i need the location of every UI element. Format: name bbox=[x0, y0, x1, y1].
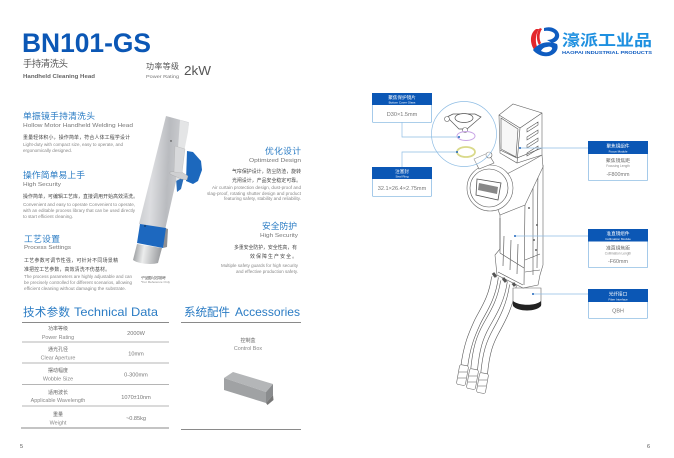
text block: high security: and effective production safety. bbox=[236, 269, 298, 274]
callout: fiber interface: QBH bbox=[612, 308, 624, 314]
row: power rating bbox=[42, 325, 146, 341]
row: wobble size: 摆动幅度 bbox=[48, 367, 68, 374]
row: wobble size: Wobble Size bbox=[43, 376, 73, 382]
text block: optimized design: 气帘保护设计，防尘防渣，旋转 bbox=[232, 168, 301, 175]
row: weight: 重量 bbox=[53, 411, 63, 418]
callout: seal ring: 32.1×26.4×2.75mm bbox=[378, 186, 427, 192]
logo: 濠派工业品 bbox=[562, 30, 652, 50]
callout: collimation module: Collimation Module bbox=[605, 237, 631, 241]
callout: focus module: -F800mm bbox=[606, 172, 630, 178]
row: power rating: 2000W bbox=[127, 331, 146, 337]
row: clear aperture: Clear Aperture bbox=[41, 356, 75, 362]
logo bbox=[531, 27, 653, 56]
callout: collimation module: 准直镜焦距 bbox=[606, 244, 630, 252]
text block: process settings: 准把控工艺参数，高效清洗不伤基材。 bbox=[24, 266, 110, 273]
callout: seal ring: 注塞封 bbox=[395, 168, 409, 175]
reference only note bbox=[141, 275, 171, 284]
reference only note: *产品图片仅供参考 bbox=[141, 275, 166, 280]
row: wobble size: 0-300mm bbox=[124, 372, 148, 378]
callout: fiber interface: Fiber Interface bbox=[608, 298, 628, 302]
text block: high security: 多重安全防护，安全性高，有 bbox=[234, 244, 297, 251]
callout: collimation module: 准直镜组件 bbox=[607, 230, 630, 237]
row: power rating: Power Rating bbox=[42, 335, 74, 341]
text block: high security: 安全防护 bbox=[262, 220, 297, 231]
panel: accessories bbox=[181, 322, 301, 430]
text block: process settings: 工艺设置 bbox=[24, 234, 60, 244]
callout: focus module: 聚焦镜焦距 bbox=[606, 157, 630, 164]
text block: hollow motor head: Hollow Motor Handheld Welding Head bbox=[23, 123, 133, 129]
heading: technical data: 技术参数 bbox=[23, 305, 70, 319]
text block: process settings: The process parameters are highly adjustable and can bbox=[24, 274, 133, 279]
text block: optimized design: Optimized Design bbox=[249, 158, 301, 164]
text block: process settings: Process Settings bbox=[24, 245, 71, 251]
page number left: 5 bbox=[20, 444, 23, 450]
text block: optimized design: Air curtain protection design, dust-proof and bbox=[212, 185, 302, 190]
text block: high security: 效保障生产安全。 bbox=[250, 253, 297, 260]
text block: easy operation: 操作简单，可编辑工艺库，直接调用开始高效清洗。 bbox=[23, 193, 138, 200]
text block: hollow motor head: 单振镜手持清洗头 bbox=[23, 110, 95, 121]
callout: fiber interface bbox=[532, 289, 648, 318]
row: wobble size bbox=[43, 367, 148, 382]
subtitle: handheld cleaning head: 手持清洗头 bbox=[23, 58, 68, 69]
row: weight: ~0.85kg bbox=[126, 416, 146, 422]
row: wavelength: Applicable Wavelength bbox=[31, 398, 85, 404]
text block: optimized design: 优化设计 bbox=[265, 145, 301, 156]
callout: focus module: 聚焦镜组件 bbox=[607, 142, 630, 150]
power rating: 2kW bbox=[184, 63, 212, 78]
panel: accessories: 控制盒 bbox=[240, 337, 256, 344]
text block: easy operation: to start efficient cleaning. bbox=[23, 214, 73, 219]
text block: hollow motor head: 重量轻体积小，操作简单，符合人体工程学设计 bbox=[23, 134, 130, 141]
table: technical data bbox=[21, 322, 169, 428]
row: weight bbox=[50, 411, 146, 426]
reference only note: *For Reference Only bbox=[141, 280, 171, 284]
heading: technical data: Technical Data bbox=[74, 305, 158, 319]
heading: accessories: Accessories bbox=[235, 305, 300, 319]
title: BN101-GS bbox=[22, 28, 151, 58]
text block: optimized design: slag-proof, rotating shutter design and product bbox=[207, 191, 302, 196]
row: wavelength: 1070±10nm bbox=[121, 395, 151, 401]
text block: process settings: 工艺参数可调节性强，可针对不同场景精 bbox=[24, 257, 118, 264]
text block: high security: High Security bbox=[260, 233, 298, 239]
callout: seal ring: Seal Ring bbox=[395, 174, 409, 178]
text block: easy operation: 操作简单易上手 bbox=[23, 169, 85, 180]
icon: logo swirl bbox=[531, 27, 559, 56]
text block: high security: Multiple safety guards for high security bbox=[221, 263, 299, 268]
row: weight: Weight bbox=[50, 420, 67, 426]
purple ring bbox=[457, 132, 475, 140]
text block: easy operation: Convenient and easy to operate Convenient to operate, bbox=[23, 202, 135, 207]
text block: high security bbox=[221, 220, 299, 274]
callout: bottom cover glass bbox=[372, 93, 460, 138]
hoses bbox=[456, 277, 513, 394]
text block: hollow motor head: ergonomically designed. bbox=[23, 148, 72, 153]
row: clear aperture: 10mm bbox=[128, 352, 144, 358]
rotary disc bbox=[467, 152, 513, 211]
heading: accessories bbox=[184, 305, 300, 319]
subtitle: handheld cleaning head bbox=[23, 58, 95, 80]
panel: accessories: Control Box bbox=[234, 346, 262, 352]
callout: seal ring bbox=[372, 151, 458, 196]
subtitle: handheld cleaning head: Handheld Cleaning Head bbox=[23, 74, 95, 80]
text block: optimized design: 光闸设计，产品安全稳定可靠。 bbox=[232, 177, 301, 184]
text block: hollow motor head: Light-duty with compact size, easy to operate, and bbox=[23, 142, 124, 147]
callout: focus module: Focus Module bbox=[609, 150, 628, 154]
callout: collimation module bbox=[514, 229, 648, 268]
power rating bbox=[146, 61, 212, 80]
row: wavelength bbox=[31, 389, 151, 404]
row: wavelength: 适用波长 bbox=[48, 389, 68, 396]
text block: process settings: be precisely controlled for different scenarios, allowing bbox=[24, 280, 133, 285]
row: clear aperture: 通光孔径 bbox=[48, 346, 68, 353]
logo: HAOPAI INDUSTRIAL PRODUCTS bbox=[562, 50, 653, 56]
callout: fiber interface: 光纤接口 bbox=[609, 290, 628, 298]
callout: focus module bbox=[519, 141, 648, 181]
callout: bottom cover glass: D30×1.5mm bbox=[387, 112, 418, 118]
text block: optimized design: featuring safety, stability and reliability. bbox=[224, 196, 301, 201]
lower body bbox=[493, 165, 543, 288]
bracket part bbox=[444, 114, 481, 132]
callout: bottom cover glass: Bottom Cover Glass bbox=[389, 100, 416, 104]
callout: focus module: Focusing Length bbox=[606, 164, 630, 168]
heading: technical data bbox=[23, 305, 158, 319]
callout: collimation module: -F60mm bbox=[608, 259, 629, 265]
text block: easy operation bbox=[23, 169, 138, 219]
text block: process settings: efficient cleaning without damaging the substrate. bbox=[24, 286, 126, 291]
row: clear aperture bbox=[41, 346, 144, 362]
heading: accessories: 系统配件 bbox=[184, 305, 230, 319]
text block: hollow motor head bbox=[23, 110, 133, 153]
yellow ring bbox=[457, 147, 475, 157]
text block: process settings bbox=[24, 234, 133, 291]
lens detail circle bbox=[432, 102, 496, 166]
row: power rating: 功率等级 bbox=[48, 325, 68, 332]
power rating: 功率等级 bbox=[146, 61, 179, 71]
power rating: Power Rating bbox=[146, 74, 179, 80]
top module bbox=[499, 104, 542, 163]
callout: bottom cover glass: 聚焦保护镜片 bbox=[388, 94, 416, 101]
text block: easy operation: with an editable process library that can be used directly bbox=[23, 208, 136, 213]
base cylinder bbox=[513, 288, 541, 310]
technical drawing: laser head bbox=[432, 102, 543, 394]
text block: optimized design bbox=[207, 145, 302, 201]
page number right: 6 bbox=[647, 444, 650, 450]
callout: collimation module: Collimation Length bbox=[605, 252, 631, 256]
icon: control box bbox=[224, 372, 274, 405]
middle bracket bbox=[497, 155, 543, 215]
product photo: handheld cleaning head bbox=[133, 116, 202, 264]
text block: easy operation: High Security bbox=[23, 182, 61, 188]
